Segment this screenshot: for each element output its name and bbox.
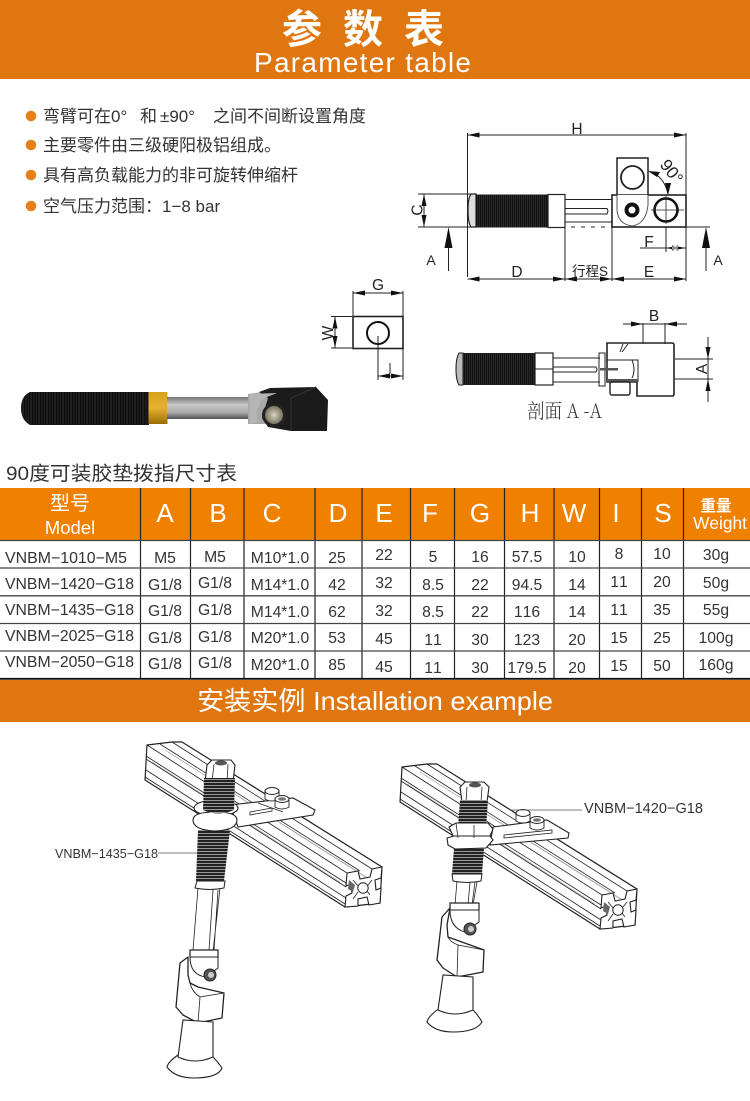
aluminium rail <box>145 742 382 907</box>
technical drawing: end view G W I: W <box>320 325 337 340</box>
table row VNBM-1435-G18: 32 <box>375 603 393 620</box>
section arrows A <box>444 227 710 271</box>
table row VNBM-2050-G18: 160g <box>699 657 733 674</box>
aluminium rail <box>400 764 637 929</box>
dimension labels: A <box>713 252 723 268</box>
table row VNBM-1420-G18: 11 <box>610 574 628 591</box>
dimension labels <box>410 121 723 281</box>
table row VNBM-2050-G18: 179.5 <box>507 660 547 677</box>
table row VNBM-1435-G18: 11 <box>610 602 628 619</box>
feature bullet list: 具有高负载能力的非可旋转伸缩杆 <box>43 166 298 185</box>
table row VNBM-1420-G18: VNBM−1420−G18 <box>5 576 134 593</box>
table row VNBM-1420-G18: 20 <box>653 574 671 591</box>
table row VNBM-1420-G18 <box>5 574 729 594</box>
piston rod <box>455 881 477 905</box>
table row VNBM-2025-G18: G1/8 <box>198 629 232 646</box>
table row VNBM-1420-G18: 14 <box>568 577 586 594</box>
feature bullet list: 主要零件由三级硬阳极铝组成。 <box>43 136 281 155</box>
table row VNBM-2050-G18: VNBM−2050−G18 <box>5 654 134 671</box>
dimension labels: 行程S <box>572 264 608 279</box>
table row VNBM-1420-G18: 50g <box>703 575 729 592</box>
table row VNBM-2050-G18: 45 <box>375 659 393 676</box>
suction cup <box>167 1020 222 1078</box>
feature bullet list: ±90° <box>160 107 195 126</box>
technical drawing: section A-A: B <box>649 308 659 325</box>
table row VNBM-2025-G18: 25 <box>653 630 671 647</box>
table row VNBM-1010-M5: 8 <box>615 546 624 563</box>
table row VNBM-2050-G18: 20 <box>568 660 586 677</box>
table row VNBM-1010-M5: 22 <box>375 547 393 564</box>
table row VNBM-1435-G18: G1/8 <box>148 603 182 620</box>
dimension labels: C <box>410 204 426 216</box>
table row VNBM-1420-G18: 22 <box>471 577 489 594</box>
table row VNBM-2025-G18: 30 <box>471 632 489 649</box>
table row VNBM-2025-G18: VNBM−2025−G18 <box>5 628 134 645</box>
table row VNBM-2025-G18: 123 <box>514 632 540 649</box>
table row VNBM-1435-G18: 116 <box>514 604 540 621</box>
table row VNBM-2025-G18: 53 <box>328 630 346 647</box>
table row VNBM-2025-G18 <box>5 628 733 649</box>
table header row: A <box>156 498 174 528</box>
technical drawing: end view G W I <box>320 277 403 380</box>
dimension labels: H <box>571 121 583 138</box>
table row VNBM-2050-G18: 85 <box>328 657 346 674</box>
caption: 剖面 A-A: 剖面 A -A <box>527 395 603 424</box>
model label 1420: VNBM−1420−G18 <box>584 801 703 817</box>
feature bullet list: 之间不间断设置角度 <box>213 107 366 126</box>
clamp block <box>612 158 686 227</box>
table row VNBM-1420-G18: 42 <box>328 577 346 594</box>
table row VNBM-1435-G18: 14 <box>568 604 586 621</box>
table row VNBM-1420-G18: 94.5 <box>512 577 543 594</box>
table row VNBM-1435-G18: VNBM−1435−G18 <box>5 602 134 619</box>
dimension labels: E <box>644 264 654 281</box>
table row VNBM-2050-G18: 30 <box>471 660 489 677</box>
table row VNBM-1435-G18: M14*1.0 <box>251 604 309 621</box>
threaded cylinder <box>193 760 238 890</box>
table row VNBM-1420-G18: M14*1.0 <box>251 577 309 594</box>
feature bullet list: 空气压力范围：1−8 bar <box>43 197 220 216</box>
feature bullet list: 弯臂可在0° <box>43 107 127 126</box>
installation banner: 安装实例 Installation example <box>197 686 553 716</box>
dimension arrows <box>422 132 686 282</box>
table row VNBM-1010-M5: M10*1.0 <box>251 550 309 567</box>
table row VNBM-1435-G18 <box>5 602 729 621</box>
table row VNBM-1435-G18: 22 <box>471 604 489 621</box>
table row VNBM-1420-G18: G1/8 <box>198 575 232 592</box>
table header row: F <box>422 498 438 528</box>
table header row: W <box>562 498 587 528</box>
table row VNBM-2050-G18: M20*1.0 <box>251 657 309 674</box>
model label 1435: VNBM−1435−G18 <box>55 846 158 861</box>
table row VNBM-1435-G18: 62 <box>328 604 346 621</box>
installation example: VNBM-1420-G18 <box>400 764 703 1032</box>
table row VNBM-1010-M5: 25 <box>328 550 346 567</box>
table header row: 型号 <box>50 492 90 515</box>
swivel arm <box>437 903 484 977</box>
table row VNBM-2025-G18: 100g <box>699 630 733 647</box>
table header row: I <box>612 498 620 528</box>
threaded cylinder <box>447 782 493 882</box>
dimension labels: A <box>426 252 436 268</box>
mounting plate <box>490 810 569 845</box>
table header row: C <box>263 498 281 528</box>
table row VNBM-1435-G18: 8.5 <box>422 604 444 621</box>
table row VNBM-1010-M5: 57.5 <box>512 549 543 566</box>
table row VNBM-1010-M5 <box>5 546 729 567</box>
table header row: Weight <box>693 513 747 533</box>
table row VNBM-1010-M5: VNBM−1010−M5 <box>5 550 127 567</box>
table row VNBM-2050-G18: G1/8 <box>148 656 182 673</box>
parameter table <box>0 488 750 679</box>
feature bullet list: 和 <box>140 107 157 126</box>
angle marker 90°: 90° <box>656 156 687 188</box>
technical drawing: section A-A <box>456 308 713 424</box>
table header row: E <box>375 498 393 528</box>
mounting plate <box>230 788 315 827</box>
table row VNBM-1010-M5: 5 <box>429 549 438 566</box>
table row VNBM-2025-G18: 20 <box>568 632 586 649</box>
table row VNBM-2025-G18: G1/8 <box>148 630 182 647</box>
table row VNBM-1010-M5: 10 <box>653 546 671 563</box>
angle marker 90° <box>648 156 687 195</box>
table row VNBM-2050-G18 <box>5 654 733 677</box>
product photo <box>21 387 328 431</box>
table row VNBM-1435-G18: G1/8 <box>198 602 232 619</box>
table row VNBM-1010-M5: 10 <box>568 549 586 566</box>
suction cup <box>427 975 482 1032</box>
table header row: D <box>329 498 347 528</box>
table grid <box>140 488 684 678</box>
dimension labels: D <box>511 264 523 281</box>
table row VNBM-2025-G18: 45 <box>375 631 393 648</box>
table header row: G <box>470 498 490 528</box>
subtitle: Parameter table: Parameter table <box>254 47 471 78</box>
technical drawing: section A-A: A <box>694 363 711 374</box>
table header row: Model <box>45 517 95 538</box>
table row VNBM-1420-G18: 8.5 <box>422 577 444 594</box>
technical drawing: end view G W I: G <box>372 277 384 294</box>
table row VNBM-1435-G18: 35 <box>653 602 671 619</box>
table row VNBM-1435-G18: 55g <box>703 602 729 619</box>
technical drawing: side view with dimensions <box>410 121 723 282</box>
table header row: H <box>521 498 539 528</box>
feature bullet list <box>26 107 366 216</box>
table row VNBM-2025-G18: 11 <box>424 632 442 649</box>
table row VNBM-2025-G18: 15 <box>610 630 628 647</box>
table header row <box>0 488 750 540</box>
installation example: VNBM-1435-G18 <box>55 742 382 1078</box>
table row VNBM-2050-G18: 50 <box>653 658 671 675</box>
table row VNBM-2050-G18: 15 <box>610 658 628 675</box>
installation banner <box>0 680 750 722</box>
table row VNBM-1010-M5: M5 <box>204 549 226 566</box>
table row VNBM-2050-G18: 11 <box>424 660 442 677</box>
actuator body <box>468 194 612 228</box>
swivel arm <box>176 950 224 1023</box>
table row VNBM-1010-M5: 16 <box>471 549 489 566</box>
table heading: 90度可装胶垫拨指尺寸表 <box>6 463 237 485</box>
table row VNBM-1010-M5: 30g <box>703 547 729 564</box>
table row VNBM-2050-G18: G1/8 <box>198 655 232 672</box>
table row VNBM-2025-G18: M20*1.0 <box>251 630 309 647</box>
table header row: B <box>209 498 227 528</box>
header banner <box>0 0 750 79</box>
table row VNBM-1420-G18: 32 <box>375 575 393 592</box>
table row VNBM-1420-G18: G1/8 <box>148 577 182 594</box>
table header row: 重量 <box>700 497 732 515</box>
piston rod <box>193 888 220 952</box>
dimension labels: F <box>644 234 654 251</box>
table row VNBM-1010-M5: M5 <box>154 550 176 567</box>
table header row: S <box>654 498 672 528</box>
